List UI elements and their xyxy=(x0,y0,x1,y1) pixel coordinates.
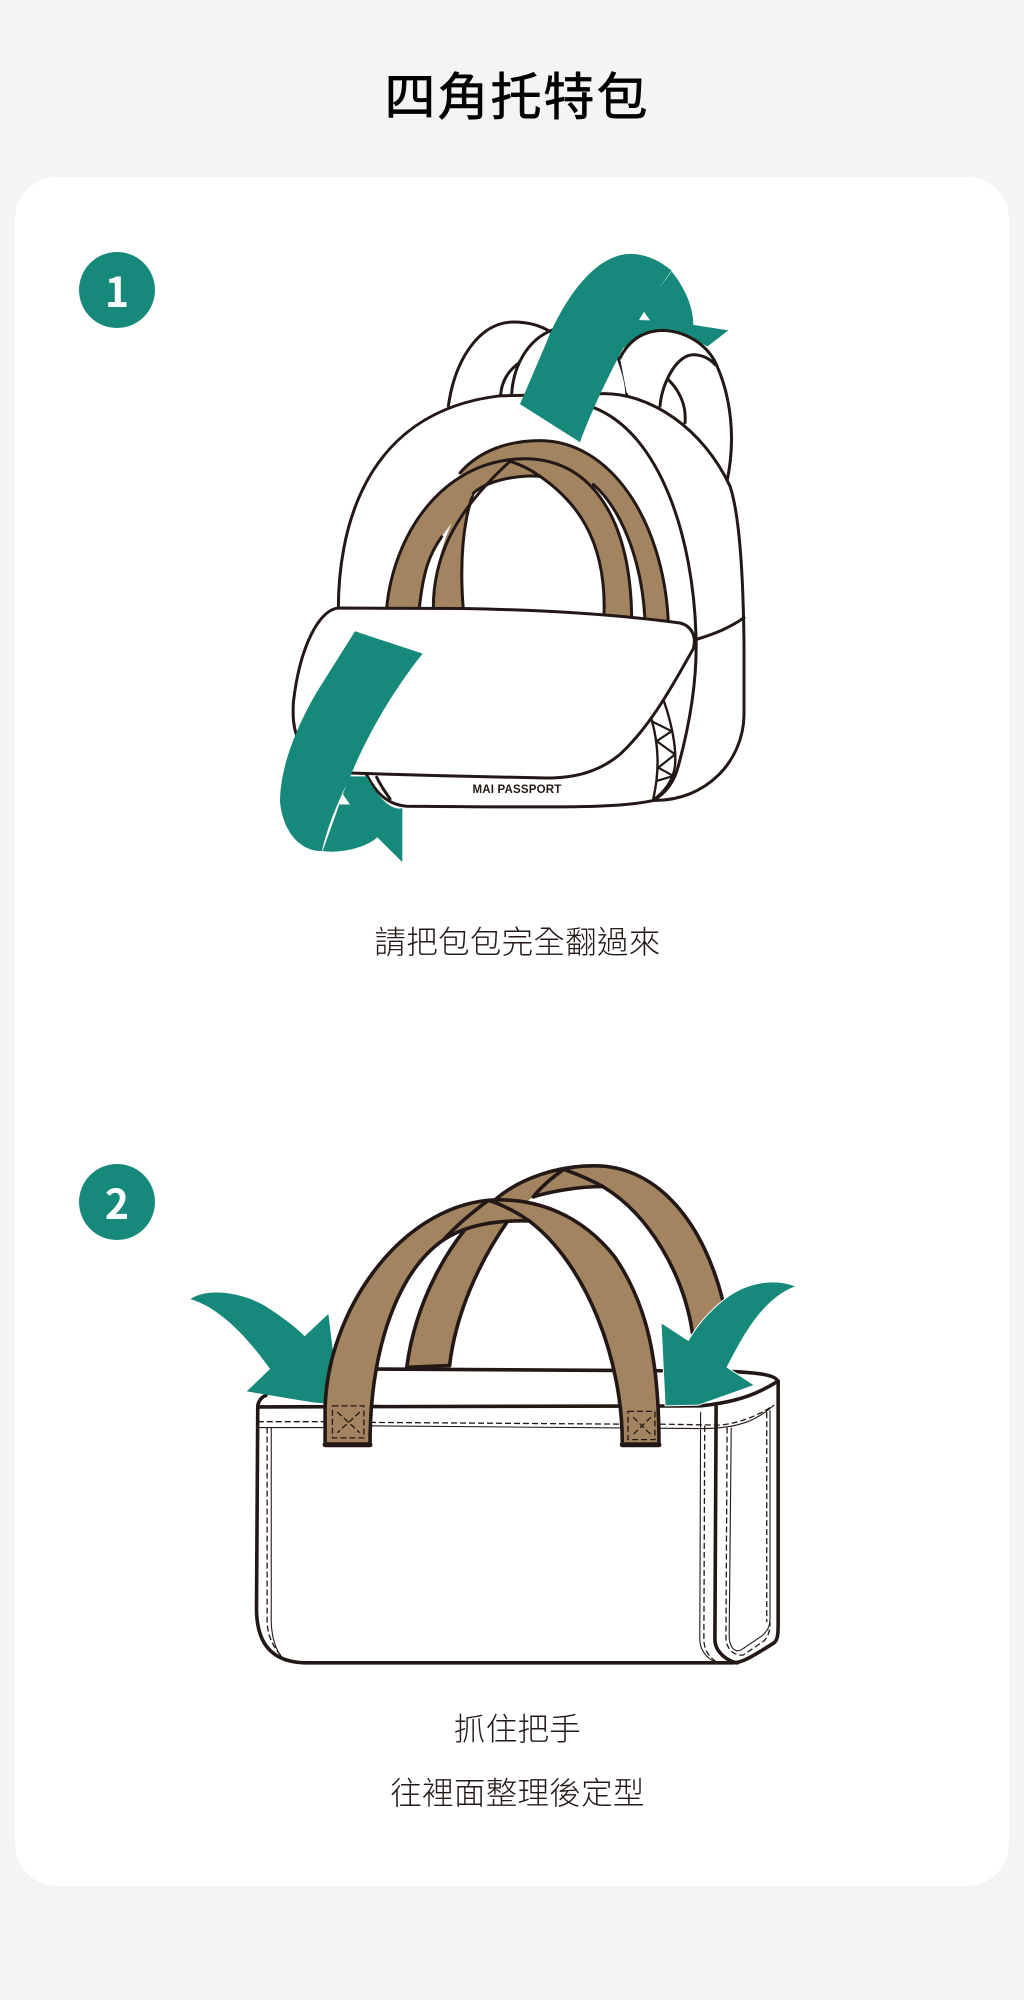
handle stitch patches xyxy=(332,1406,655,1440)
title: 四角托特包 xyxy=(384,69,650,126)
arrow: bottom arrow main band xyxy=(280,631,423,851)
step 2 number badge: 2 xyxy=(105,1171,129,1231)
arrow: right reshaping arrow xyxy=(661,1282,797,1406)
right shoulder strap xyxy=(620,330,732,483)
front flap xyxy=(293,608,694,778)
rear handle xyxy=(407,1166,723,1367)
step 2 caption line 2: 往裡面整理後定型 xyxy=(390,1775,645,1811)
brown handles xyxy=(387,441,668,622)
bottom panel inner line xyxy=(377,777,390,799)
arrow: bottom arrow rear section xyxy=(323,776,402,862)
illustration: tote bag with handles and reshaping arrows xyxy=(190,1164,796,1665)
step 1 caption: 請把包包完全翻過來 xyxy=(374,924,661,960)
back loops of the bag xyxy=(448,322,627,406)
arrow: top arrow rear section xyxy=(620,271,728,348)
step 1 number badge: 1 xyxy=(105,259,129,319)
arrow: top arrow main band xyxy=(520,254,672,442)
arrow: left reshaping arrow xyxy=(190,1293,334,1403)
backpack main body xyxy=(338,394,744,807)
stitching lines xyxy=(258,1405,774,1662)
backpack logo text: MAI PASSPORT xyxy=(472,784,562,796)
step 2 number badge xyxy=(79,1164,155,1240)
step 1 number badge xyxy=(79,252,155,328)
mesh side pocket xyxy=(652,701,675,800)
step 2 caption line 1: 抓住把手 xyxy=(454,1711,581,1747)
tote body xyxy=(256,1369,778,1663)
illustration: backpack being turned inside out xyxy=(280,254,746,862)
front handle xyxy=(325,1200,659,1445)
